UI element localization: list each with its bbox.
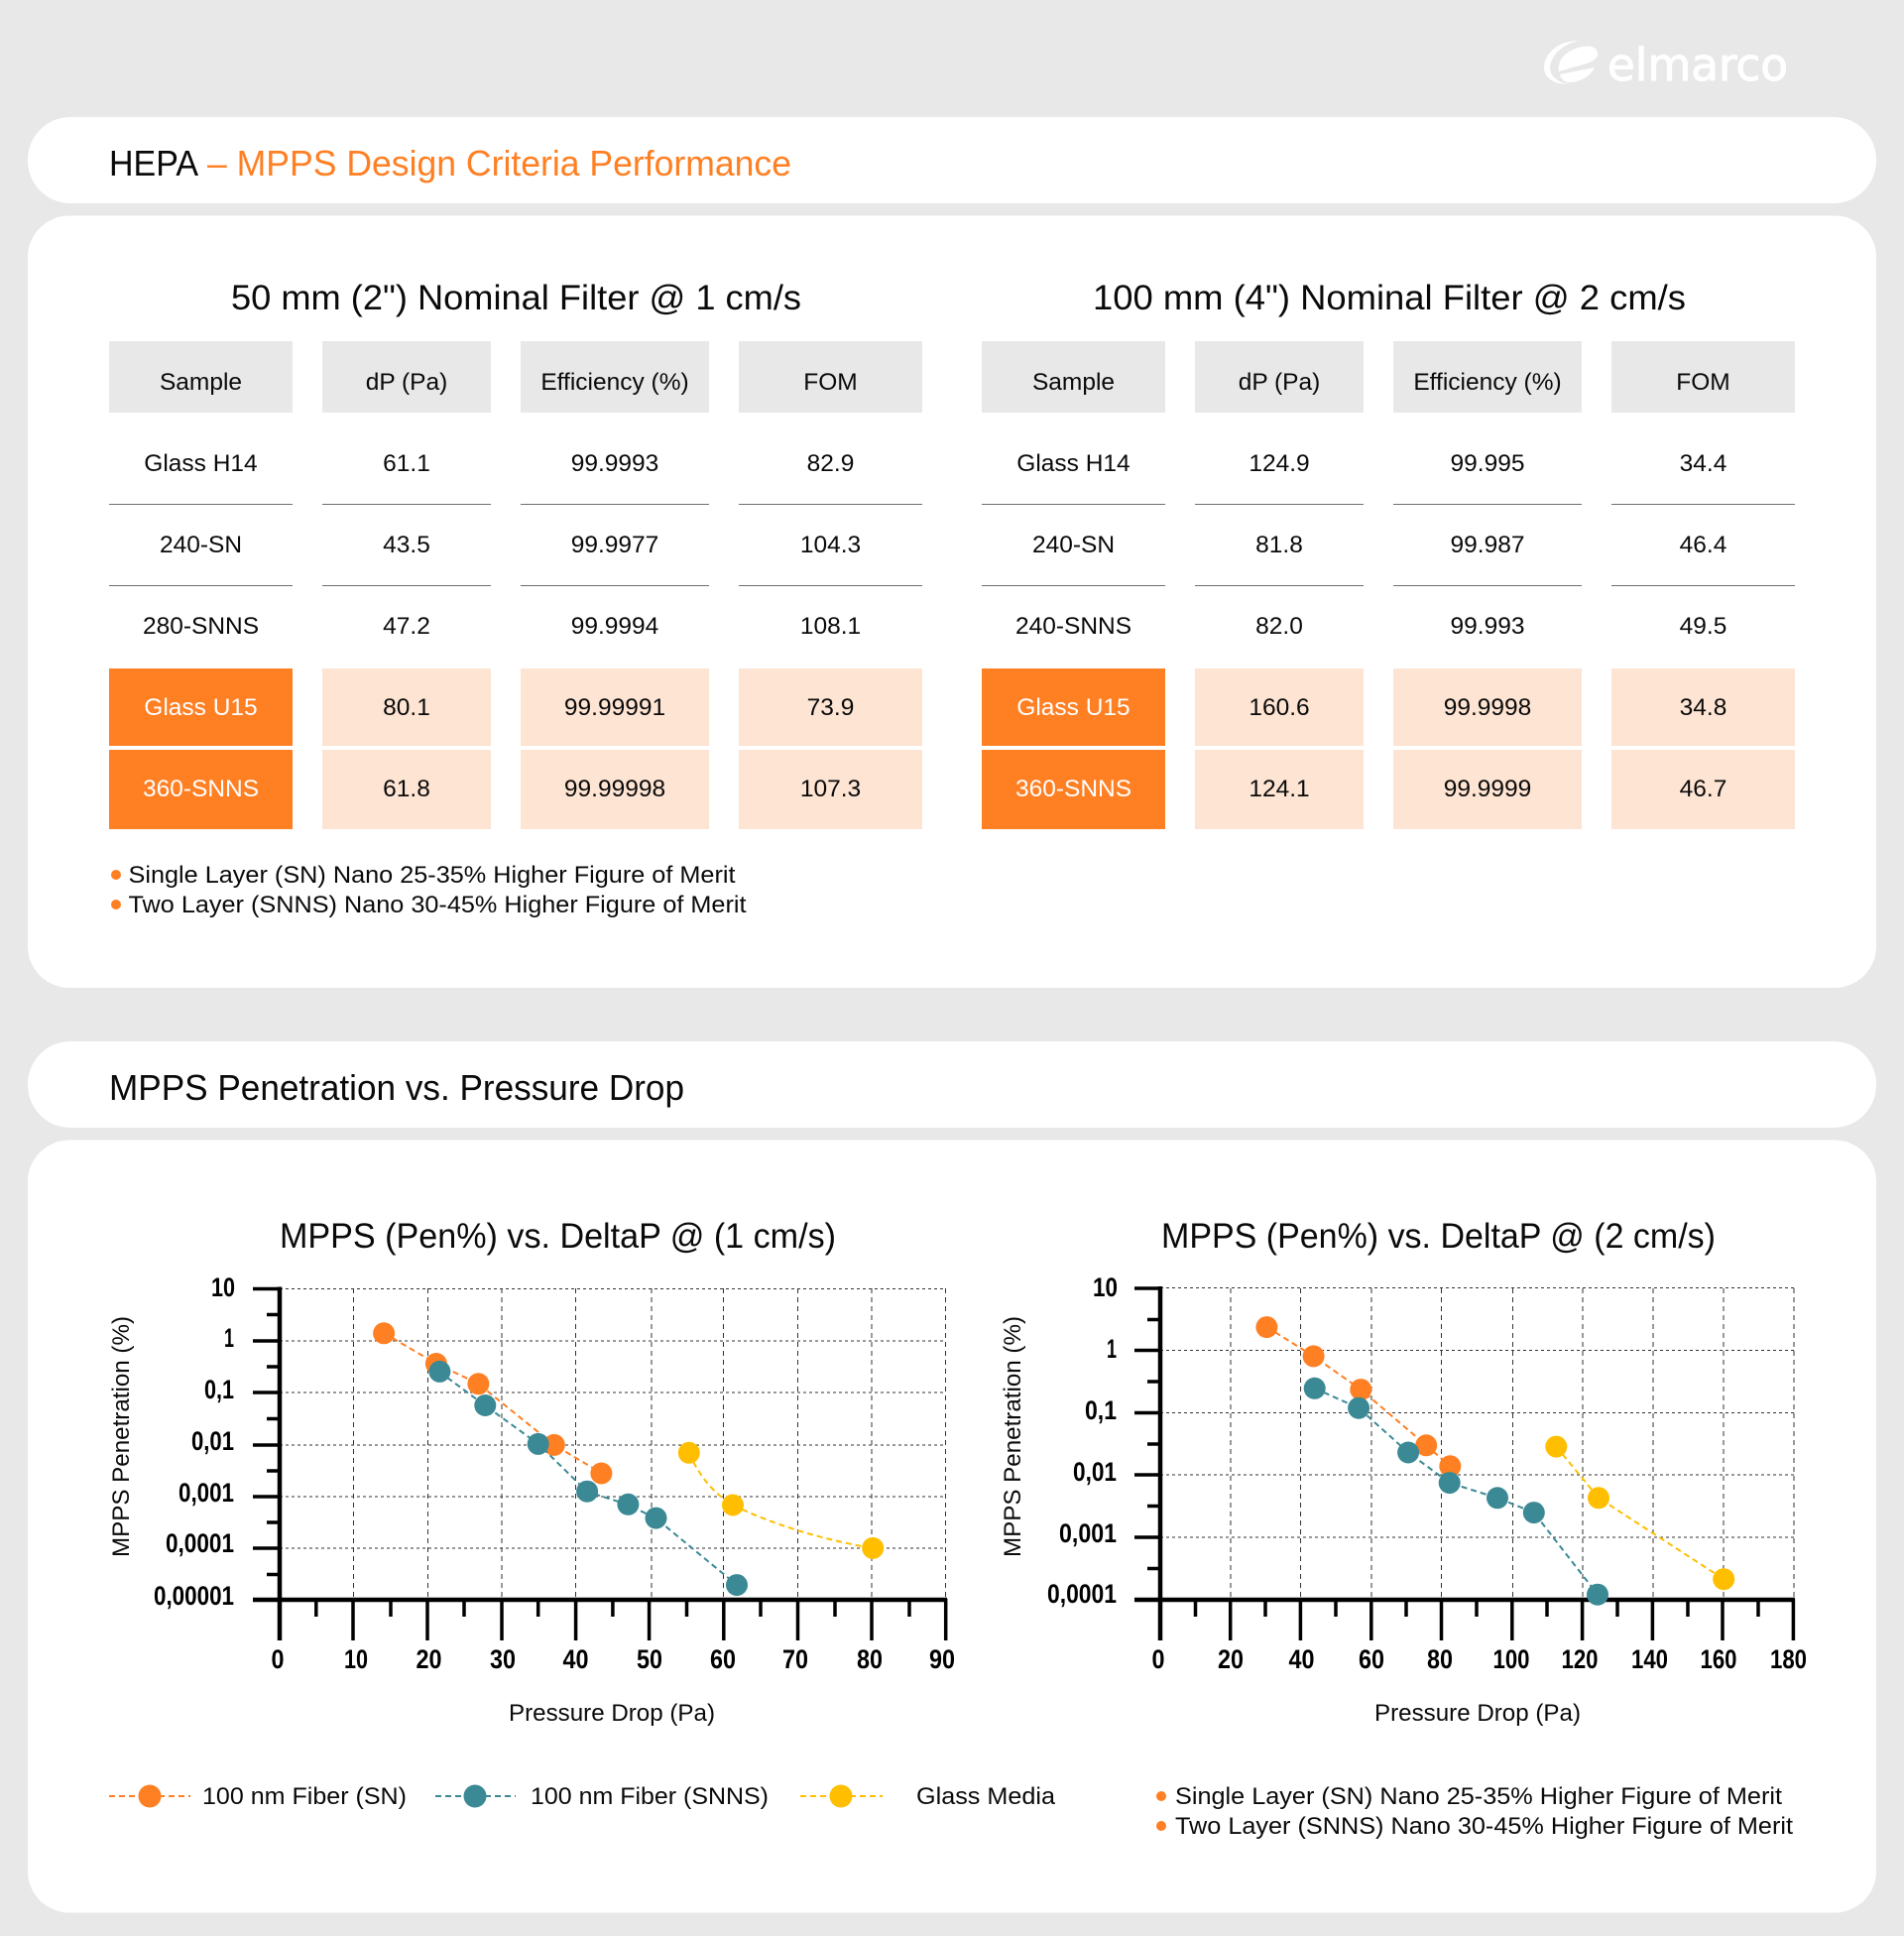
table: 50 mm filter bbox=[109, 279, 922, 829]
x tick labels: 30 bbox=[490, 1644, 516, 1674]
row: 360-SNNS: 46.7 bbox=[1680, 776, 1726, 802]
chart: 2 cm/s bbox=[1000, 1217, 1807, 1727]
row: Glass U15 bbox=[109, 668, 922, 746]
legend item: SN: 100 nm Fiber (SN) bbox=[202, 1783, 407, 1810]
row: Glass U15: Glass U15 bbox=[1016, 694, 1130, 721]
row: Glass H14 bbox=[109, 450, 922, 504]
header row: Efficiency (%) bbox=[1413, 369, 1562, 396]
title accent: – MPPS Design Criteria Performance bbox=[207, 143, 791, 183]
header row: Sample bbox=[1032, 369, 1115, 396]
bullet notes: Two Layer (SNNS) Nano 30-45% Higher Figure of Merit bbox=[129, 892, 747, 918]
bullet notes: Single Layer (SN) Nano 25-35% Higher Figure of Merit bbox=[129, 862, 736, 889]
header row: Efficiency (%) bbox=[540, 369, 689, 396]
x axis label: Pressure Drop (Pa) bbox=[1374, 1700, 1581, 1727]
row: 280-SNNS bbox=[143, 613, 861, 640]
x tick labels: 40 bbox=[1289, 1644, 1315, 1674]
row: Glass U15 bbox=[982, 668, 1795, 746]
panel: page title bar bbox=[28, 117, 1876, 203]
row: 360-SNNS bbox=[109, 750, 922, 829]
x tick labels: 180 bbox=[1770, 1644, 1807, 1674]
chart: 1 cm/s bbox=[108, 1217, 955, 1727]
axes and ticks bbox=[253, 1287, 947, 1640]
row: 240-SN: 81.8 bbox=[1255, 532, 1303, 558]
row: 280-SNNS: 99.9994 bbox=[571, 613, 658, 640]
row: 360-SNNS: 124.1 bbox=[1249, 776, 1310, 802]
row: 240-SNNS bbox=[1015, 613, 1726, 640]
row: 240-SNNS: 49.5 bbox=[1680, 613, 1726, 640]
row: Glass U15: 80.1 bbox=[383, 694, 430, 721]
y tick labels: 0,1 bbox=[204, 1375, 234, 1404]
row: 360-SNNS: 99.99998 bbox=[564, 776, 665, 802]
title: HEPA bbox=[109, 143, 198, 183]
x tick labels bbox=[272, 1644, 955, 1674]
x tick labels: 40 bbox=[563, 1644, 589, 1674]
x tick labels: 140 bbox=[1631, 1644, 1668, 1674]
legend item: SNNS: 100 nm Fiber (SNNS) bbox=[531, 1783, 769, 1810]
table heading: 100 mm (4") Nominal Filter @ 2 cm/s bbox=[1093, 279, 1686, 317]
row: Glass U15: 34.8 bbox=[1680, 694, 1726, 721]
row: 280-SNNS: 108.1 bbox=[800, 613, 861, 640]
y tick labels: 0,0001 bbox=[1047, 1579, 1117, 1609]
row: Glass H14: 82.9 bbox=[807, 450, 854, 477]
x tick labels: 20 bbox=[416, 1644, 442, 1674]
chart title: MPPS (Pen%) vs. DeltaP @ (2 cm/s) bbox=[1161, 1217, 1716, 1256]
series: 100 nm Fiber (SNNS) bbox=[428, 1361, 748, 1596]
series: Glass Media bbox=[678, 1442, 884, 1559]
y tick labels: 10 bbox=[1093, 1272, 1118, 1302]
x tick labels: 0 bbox=[1152, 1644, 1164, 1674]
row: Glass H14: 34.4 bbox=[1680, 450, 1726, 477]
row: 360-SNNS: 360-SNNS bbox=[143, 776, 259, 802]
row: Glass H14 bbox=[982, 450, 1795, 504]
section heading: MPPS Penetration vs. Pressure Drop bbox=[109, 1067, 684, 1108]
series: 100 nm Fiber (SNNS) bbox=[1304, 1378, 1608, 1606]
bullet notes bbox=[111, 862, 747, 918]
legend bbox=[109, 1783, 1055, 1810]
row: 240-SN: 99.987 bbox=[1451, 532, 1524, 558]
series: 100 nm Fiber (SN) bbox=[1255, 1316, 1461, 1477]
axes and ticks bbox=[1134, 1286, 1795, 1640]
row: 240-SN: 99.9977 bbox=[571, 532, 658, 558]
x tick labels: 50 bbox=[637, 1644, 662, 1674]
y tick labels: 0,0001 bbox=[166, 1528, 234, 1558]
x tick labels: 100 bbox=[1493, 1644, 1529, 1674]
x axis label: Pressure Drop (Pa) bbox=[509, 1700, 715, 1727]
legend item: Glass Media bbox=[800, 1783, 1055, 1810]
x tick labels: 0 bbox=[272, 1644, 284, 1674]
row: 360-SNNS: 61.8 bbox=[383, 776, 430, 802]
bullet notes: Two Layer (SNNS) Nano 30-45% Higher Figure of Merit bbox=[1175, 1813, 1793, 1840]
bullet notes bbox=[1156, 1783, 1793, 1840]
y tick labels: 10 bbox=[211, 1272, 235, 1302]
bullet notes: Single Layer (SN) Nano 25-35% Higher Figure of Merit bbox=[1175, 1783, 1782, 1810]
y tick labels: 0,001 bbox=[1059, 1518, 1117, 1548]
x tick labels: 70 bbox=[782, 1644, 808, 1674]
table: 100 mm filter bbox=[982, 279, 1795, 829]
header row bbox=[982, 341, 1795, 413]
row: Glass U15: 99.99991 bbox=[564, 694, 665, 721]
row: 240-SN bbox=[982, 532, 1795, 585]
row: 240-SNNS: 82.0 bbox=[1255, 613, 1303, 640]
legend item: SN bbox=[109, 1783, 407, 1810]
y tick labels: 0,01 bbox=[191, 1426, 234, 1456]
y tick labels: 1 bbox=[224, 1323, 234, 1353]
x tick labels: 10 bbox=[344, 1644, 368, 1674]
row: Glass U15: Glass U15 bbox=[144, 694, 258, 721]
row: 360-SNNS: 360-SNNS bbox=[1015, 776, 1131, 802]
row: 240-SN: 46.4 bbox=[1680, 532, 1726, 558]
series: Glass Media bbox=[1545, 1436, 1734, 1590]
row: Glass U15: 99.9998 bbox=[1444, 694, 1531, 721]
header row bbox=[109, 341, 922, 413]
header row: FOM bbox=[803, 369, 858, 396]
row: 240-SN: 240-SN bbox=[1032, 532, 1115, 558]
grid bbox=[280, 1288, 946, 1599]
row: Glass U15: 73.9 bbox=[807, 694, 854, 721]
grid bbox=[1160, 1287, 1794, 1599]
y tick labels: 0,01 bbox=[1073, 1457, 1117, 1487]
y tick labels: 0,001 bbox=[178, 1478, 234, 1508]
table heading: 50 mm (2") Nominal Filter @ 1 cm/s bbox=[231, 279, 801, 317]
legend item: Glass Media: Glass Media bbox=[916, 1783, 1055, 1810]
x tick labels: 20 bbox=[1218, 1644, 1244, 1674]
panel: charts bbox=[28, 1141, 1876, 1912]
chart title: MPPS (Pen%) vs. DeltaP @ (1 cm/s) bbox=[280, 1217, 836, 1256]
row: 240-SNNS: 99.993 bbox=[1451, 613, 1524, 640]
x tick labels: 80 bbox=[857, 1644, 883, 1674]
series: 100 nm Fiber (SN) bbox=[373, 1322, 612, 1484]
x tick labels: 60 bbox=[1359, 1644, 1384, 1674]
y tick labels bbox=[1047, 1272, 1118, 1609]
row: Glass H14: 124.9 bbox=[1249, 450, 1310, 477]
row: 360-SNNS bbox=[982, 750, 1795, 829]
row: Glass H14: 99.995 bbox=[1451, 450, 1524, 477]
row: Glass H14: 61.1 bbox=[383, 450, 430, 477]
header row: FOM bbox=[1676, 369, 1730, 396]
x tick labels: 160 bbox=[1700, 1644, 1737, 1674]
x tick labels: 120 bbox=[1561, 1644, 1599, 1674]
row: 280-SNNS: 47.2 bbox=[383, 613, 430, 640]
row: 280-SNNS: 280-SNNS bbox=[143, 613, 259, 640]
row: 240-SNNS: 240-SNNS bbox=[1015, 613, 1131, 640]
logo: elmarco: elmarco bbox=[1607, 39, 1788, 91]
x tick labels: 90 bbox=[929, 1644, 955, 1674]
y axis label: MPPS Penetration (%) bbox=[1000, 1316, 1026, 1557]
header row: Sample bbox=[160, 369, 242, 396]
panel: tables bbox=[28, 216, 1876, 988]
panel: section title bar bbox=[28, 1041, 1876, 1128]
row: Glass H14: Glass H14 bbox=[144, 450, 258, 477]
header row: dP (Pa) bbox=[1239, 369, 1320, 396]
row: 240-SN: 104.3 bbox=[800, 532, 861, 558]
row: 240-SN bbox=[109, 532, 922, 585]
x tick labels: 80 bbox=[1427, 1644, 1453, 1674]
row: Glass H14: Glass H14 bbox=[1016, 450, 1130, 477]
y axis label: MPPS Penetration (%) bbox=[108, 1316, 135, 1557]
row: 360-SNNS: 99.9999 bbox=[1444, 776, 1531, 802]
row: 240-SN: 43.5 bbox=[383, 532, 430, 558]
y tick labels: 1 bbox=[1107, 1334, 1117, 1364]
row: 240-SN: 240-SN bbox=[160, 532, 242, 558]
x tick labels bbox=[1152, 1644, 1807, 1674]
header row: dP (Pa) bbox=[366, 369, 447, 396]
x tick labels: 60 bbox=[710, 1644, 736, 1674]
row: Glass U15: 160.6 bbox=[1249, 694, 1310, 721]
y tick labels bbox=[154, 1272, 235, 1611]
row: Glass H14: 99.9993 bbox=[571, 450, 658, 477]
row: 360-SNNS: 107.3 bbox=[800, 776, 861, 802]
y tick labels: 0,00001 bbox=[154, 1581, 234, 1611]
y tick labels: 0,1 bbox=[1085, 1395, 1117, 1425]
